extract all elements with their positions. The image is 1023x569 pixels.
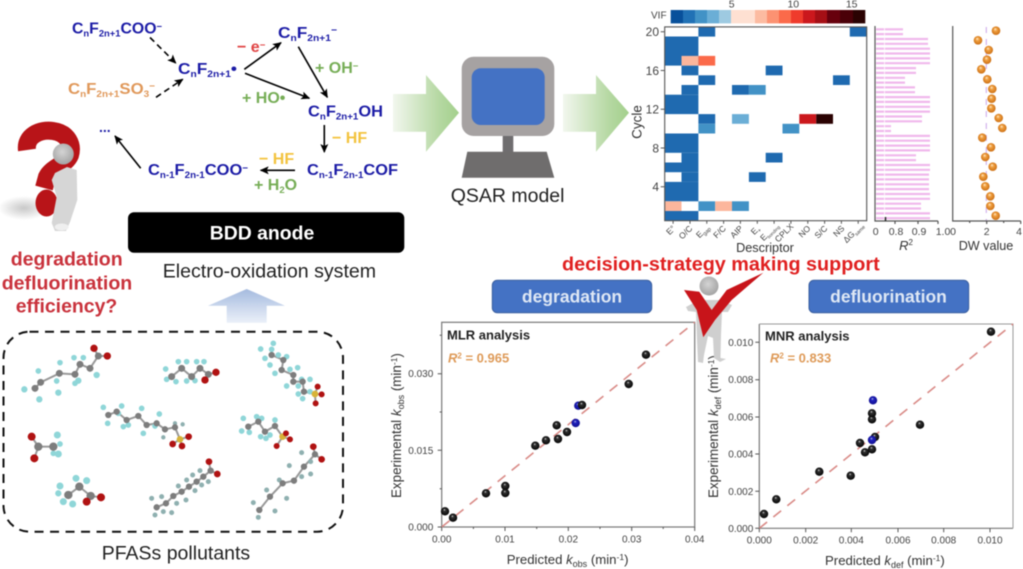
chart: MNR defluorination scatter: 0.004: [728, 450, 754, 460]
compound: perfluoro alcohol: n: [320, 112, 326, 122]
chart: MNR defluorination scatter: 0.010: [728, 338, 754, 349]
chart: MNR defluorination scatter: 0.008: [728, 375, 754, 386]
label: plus water: + H: [254, 177, 279, 194]
chart: MNR defluorination scatter: [706, 324, 1013, 569]
chart: MLR degradation scatter: 0.03: [622, 535, 642, 546]
chart: MNR defluorination scatter: Predicted k: [825, 553, 891, 568]
chart: MLR degradation scatter: [389, 322, 705, 569]
compound: shortened carboxylate: C: [148, 162, 160, 179]
compound: perfluoroalkyl radical: 2n+1: [207, 69, 232, 80]
chart: R2 bars: 2: [908, 238, 913, 247]
chart: MNR defluorination scatter: Experimental k: [706, 409, 721, 498]
compound: acyl fluoride: n-1: [319, 170, 334, 181]
chart: VIF heatmap: 16: [646, 64, 659, 78]
chart: DW value dot plot: 0: [950, 226, 956, 238]
compound: perfluoro alcohol: C: [308, 104, 320, 120]
button: defluorination: defluorination: [830, 286, 947, 306]
label: minus electron: −: [260, 40, 266, 51]
button: degradation: degradation: [522, 286, 622, 306]
label: plus hydroxyl radical: + HO•: [242, 90, 286, 107]
chart: MNR defluorination scatter: 0.004: [839, 536, 864, 546]
chart: VIF heatmap: E: [749, 226, 760, 237]
arrow: green arrow to heatmap: [563, 75, 629, 152]
chart: R2 bars: 0.9: [912, 226, 926, 238]
compound: perfluoro sulfonate: F: [86, 81, 97, 98]
compound: acyl fluoride: F: [333, 162, 344, 179]
compound: perfluoro carboxylate: −: [157, 22, 162, 32]
chart: MNR defluorination scatter: 2: [779, 352, 784, 361]
heading: decision-strategy making support: decision-strategy making support: [562, 254, 880, 276]
compound: acyl fluoride: COF: [363, 162, 398, 179]
chart: MLR degradation scatter: 2: [457, 352, 462, 361]
chart: VIF heatmap: bonding: [766, 224, 781, 239]
compound: perfluoro alcohol: 2n+1: [336, 112, 359, 122]
chart: MNR defluorination scatter: 0.008: [931, 536, 957, 546]
chart: VIF heatmap: +: [757, 228, 763, 234]
compound: perfluoro carboxylate: n: [83, 28, 89, 40]
panel: BDD anode bar: [128, 212, 404, 253]
compound: perfluoro sulfonate: 2n+1: [96, 89, 120, 100]
chart: DW value dot plot: 2: [984, 226, 990, 238]
chart: R2 bars: R: [899, 238, 908, 253]
chart: VIF heatmap: NS: [831, 223, 847, 239]
label: minus electron: − e: [237, 39, 260, 56]
chart: VIF heatmap: AIP: [728, 223, 745, 240]
arrow: dashed from sulfonate: [156, 79, 183, 97]
chart: MLR degradation scatter: 0.00: [432, 535, 452, 546]
chart: MLR degradation scatter: ): [624, 552, 628, 567]
compound: perfluoro carboxylate: 2n+1: [99, 28, 121, 40]
chart: MNR defluorination scatter: 0.000: [728, 524, 754, 535]
chart: MNR defluorination scatter: = 0.833: [784, 351, 831, 366]
label: plus water: 2: [279, 185, 285, 196]
chart: MLR degradation scatter: 0.02: [559, 535, 578, 546]
chart: MLR degradation scatter: 0.030: [408, 369, 434, 380]
compound: perfluoro carboxylate: C: [72, 20, 84, 38]
chart: MLR degradation scatter: R: [448, 351, 458, 366]
arrow: green arrow to QSAR: [393, 75, 459, 152]
chart: VIF heatmap: 4: [652, 180, 659, 194]
chart: MNR defluorination scatter: MNR analysis: [765, 329, 850, 344]
compound: perfluoroalkyl radical: F: [197, 61, 208, 78]
chart: DW value dot plot: [950, 26, 1022, 253]
chart: MLR degradation scatter: 0.015: [408, 446, 434, 457]
compound: perfluoroalkyl anion: C: [278, 25, 290, 42]
chart: VIF heatmap: O/C: [677, 223, 694, 241]
compound: shortened carboxylate: −: [242, 163, 248, 174]
icon: figure holding red check mark: [684, 273, 763, 363]
button: defluorination: [809, 280, 969, 313]
arrow: radical to alcohol: [245, 73, 309, 98]
text: PFASs pollutants: PFASs pollutants: [102, 542, 250, 564]
chart: MNR defluorination scatter: (min: [706, 367, 721, 397]
compound: perfluoro alcohol: OH: [358, 104, 383, 120]
label: plus hydroxide: + OH: [315, 60, 353, 77]
chart: VIF heatmap: Descriptor: [736, 241, 795, 255]
arrow: acyl fluoride to carboxylate: [261, 169, 295, 171]
chart: R2 bars: 1.0: [936, 226, 950, 238]
chart: MLR degradation scatter: 0.01: [495, 535, 515, 546]
chart: DW value dot plot: 4: [1016, 226, 1022, 238]
chart: MLR degradation scatter: obs: [396, 394, 406, 409]
heading: degradation defluorination efficiency question: [2, 248, 132, 318]
chart: VIF heatmap: NO: [796, 223, 813, 239]
chart: MNR defluorination scatter: def: [713, 396, 723, 409]
chart: MNR defluorination scatter: 0.000: [747, 536, 772, 546]
ellipsis: ...: [99, 119, 111, 135]
compound: perfluoroalkyl anion: F: [297, 25, 308, 42]
chart: VIF heatmap: E°: [664, 223, 677, 237]
arrow: alcohol to acyl fluoride: [323, 125, 325, 152]
compound: perfluoro sulfonate: C: [68, 81, 80, 98]
arrow: dashed from carboxylate: [150, 38, 176, 63]
arrow: radical to anion: [244, 43, 281, 69]
chart: MLR degradation scatter: ): [389, 353, 404, 358]
chart: MNR defluorination scatter: -1: [933, 553, 941, 563]
chart: VIF heatmap: E: [694, 229, 705, 240]
compound: shortened carboxylate: COO: [205, 162, 242, 179]
molecule 3: [258, 341, 324, 406]
chart: VIF heatmap: E: [758, 232, 769, 243]
label: minus HF right: − HF: [332, 130, 367, 147]
arrow: upward blue arrow: [208, 289, 285, 323]
chart: MLR degradation scatter: -1: [389, 357, 399, 365]
compound: acyl fluoride: C: [307, 162, 319, 179]
chart: MLR degradation scatter: (min: [389, 365, 404, 395]
compound: perfluoro sulfonate: SO: [119, 81, 144, 98]
heading: degradation defluorination efficiency question: defluorination: [2, 272, 132, 294]
chart: MLR degradation scatter: 0.000: [408, 522, 434, 534]
compound: perfluoroalkyl radical: •: [231, 61, 237, 78]
molecule 2: [163, 359, 219, 384]
chart: VIF heatmap: gap: [702, 227, 713, 237]
compound: perfluoroalkyl radical: C: [178, 61, 190, 78]
chart: VIF heatmap: S/C: [812, 223, 829, 240]
chart: DW value dot plot: DW value: [959, 239, 1013, 253]
compound: shortened carboxylate: F: [175, 162, 185, 179]
molecule 6: [56, 475, 105, 507]
icon: thinking figure with question mark: [0, 131, 77, 231]
molecule 5: [28, 432, 62, 462]
label: plus water: O: [285, 177, 297, 194]
chart: VIF heatmap: [630, 25, 867, 255]
arrow: carboxylate to ellipsis: [115, 136, 141, 168]
chart: MNR defluorination scatter: (min: [904, 553, 933, 568]
heading: degradation defluorination efficiency question: degradation: [11, 248, 123, 270]
chart: R2 bars: 0: [873, 226, 879, 238]
compound: perfluoroalkyl anion: −: [331, 25, 337, 36]
legend: VIF colour bar: [651, 0, 865, 23]
chart: MLR degradation scatter: 0.04: [685, 535, 705, 546]
compound: perfluoroalkyl anion: 2n+1: [307, 33, 332, 44]
chart: VIF heatmap: ΔG: [841, 229, 857, 245]
compound: shortened carboxylate: 2n-1: [185, 170, 205, 181]
chart: MLR degradation scatter: Predicted k: [507, 552, 573, 567]
chart: MNR defluorination scatter: 0.002: [728, 487, 754, 498]
compound: acyl fluoride: 2n-1: [343, 170, 364, 181]
compound: perfluoro sulfonate: −: [149, 81, 155, 92]
chart: VIF heatmap: F/C: [711, 223, 728, 240]
chart: MLR degradation scatter: Experimental k: [389, 409, 404, 498]
chart: MLR degradation scatter: obs: [573, 559, 588, 569]
chart: VIF heatmap: 20: [646, 25, 659, 39]
chart: MLR degradation scatter: -1: [617, 552, 624, 562]
chart: VIF heatmap: Cycle: [630, 105, 644, 139]
chart: MNR defluorination scatter: R: [770, 351, 780, 366]
heading: degradation defluorination efficiency question: efficiency?: [16, 296, 117, 318]
text: QSAR model: QSAR model: [451, 185, 564, 207]
chart: MNR defluorination scatter: ): [706, 355, 721, 360]
molecule 8: [251, 444, 325, 519]
chart: MNR defluorination scatter: 0.002: [793, 536, 819, 546]
icon: computer: [462, 57, 554, 178]
molecule 9: [239, 414, 293, 449]
chart: MNR defluorination scatter: -1: [706, 359, 716, 367]
chart: VIF heatmap: same: [854, 224, 867, 237]
compound: perfluoro carboxylate: COO: [120, 20, 157, 38]
chart: VIF heatmap: CPLX: [773, 221, 796, 244]
label: minus HF lower: − HF: [259, 151, 294, 168]
chart: MNR defluorination scatter: 0.006: [728, 412, 754, 424]
compound: perfluoro sulfonate: n: [80, 89, 86, 100]
pathway: PFAS electro-oxidation reaction scheme: [68, 20, 398, 196]
compound: perfluoroalkyl anion: n: [290, 33, 297, 44]
panel: BDD anode bar: BDD anode: [210, 222, 314, 244]
text: electro-oxidation system: Electro-oxidation system: [163, 260, 376, 282]
molecule 7: [150, 459, 220, 517]
molecule 1: [22, 345, 111, 402]
molecule 4: [101, 404, 192, 449]
chart: MNR defluorination scatter: 0.006: [885, 536, 911, 546]
chart: VIF heatmap: 12: [646, 102, 659, 116]
chart: MLR degradation scatter: = 0.965: [462, 351, 509, 366]
compound: perfluoro alcohol: F: [326, 104, 336, 120]
button: degradation: [492, 280, 652, 313]
panel: PFAS pollutant molecules: [4, 332, 343, 532]
chart: MNR defluorination scatter: ): [940, 553, 945, 568]
compound: shortened carboxylate: n-1: [160, 170, 175, 181]
label: plus hydroxide: −: [353, 61, 359, 72]
arrow: anion to alcohol: [298, 47, 327, 97]
chart: VIF heatmap: 8: [652, 141, 659, 155]
chart: MLR degradation scatter: (min: [587, 552, 617, 567]
chart: MNR defluorination scatter: 0.010: [977, 536, 1003, 546]
chart: MLR degradation scatter: MLR analysis: [447, 327, 530, 342]
chart: R2 bars: 0.8: [889, 226, 903, 238]
chart: R2 bars: [873, 26, 950, 253]
compound: perfluoroalkyl radical: n: [190, 69, 197, 80]
compound: perfluoro sulfonate: 3: [144, 89, 149, 100]
compound: perfluoro carboxylate: F: [89, 20, 99, 38]
legend: VIF colour bar: VIF: [651, 10, 667, 22]
